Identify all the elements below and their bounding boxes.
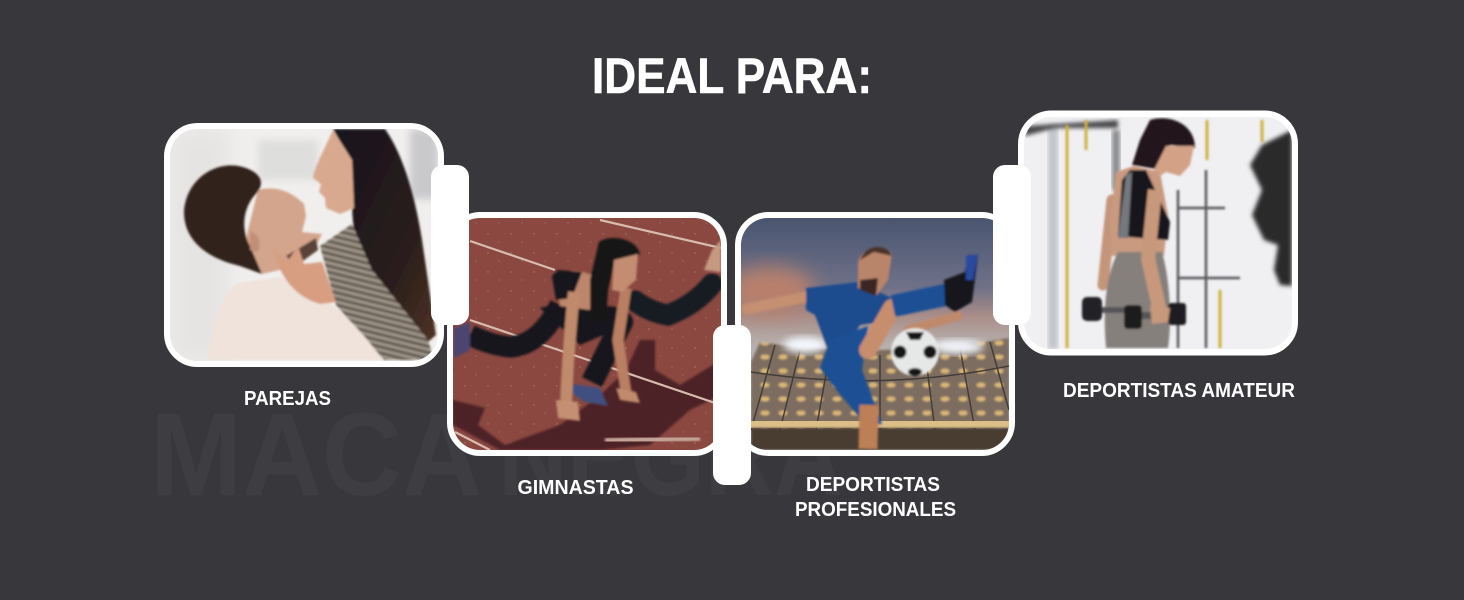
card frame: profesionales bbox=[738, 216, 1012, 452]
photo: couple bbox=[170, 129, 438, 361]
title: IDEAL PARA: bbox=[592, 48, 872, 104]
label: deportistas profesionales: PROFESIONALES bbox=[795, 498, 956, 521]
panel: gimnastas bbox=[450, 216, 724, 452]
connector pill: left bbox=[431, 165, 469, 325]
card frame: parejas bbox=[168, 126, 440, 364]
photo: woman with dumbbell in gym bbox=[1024, 117, 1292, 349]
label: deportistas profesionales: DEPORTISTAS bbox=[806, 473, 940, 496]
watermark: MACA NEGRA: MACA bbox=[150, 389, 482, 521]
watermark: MACA NEGRA: NEGRA bbox=[498, 389, 843, 521]
label: deportistas profesionales bbox=[795, 473, 956, 521]
connector pill: centre bbox=[713, 325, 751, 485]
card frame: amateur bbox=[1022, 114, 1294, 352]
photo: sprinter on track bbox=[453, 218, 721, 450]
panel: deportistas amateur bbox=[1022, 114, 1294, 352]
panel: deportistas profesionales bbox=[725, 216, 1012, 452]
photo: footballer in stadium bbox=[725, 218, 1009, 450]
label: parejas: PAREJAS bbox=[244, 387, 331, 410]
watermark: MACA NEGRA bbox=[150, 389, 843, 521]
card frame: gimnastas bbox=[450, 216, 724, 452]
label: deportistas amateur: DEPORTISTAS AMATEUR bbox=[1063, 379, 1295, 402]
label: gimnastas: GIMNASTAS bbox=[518, 476, 634, 499]
connector pill: right bbox=[993, 165, 1031, 325]
panel: parejas bbox=[168, 126, 440, 364]
